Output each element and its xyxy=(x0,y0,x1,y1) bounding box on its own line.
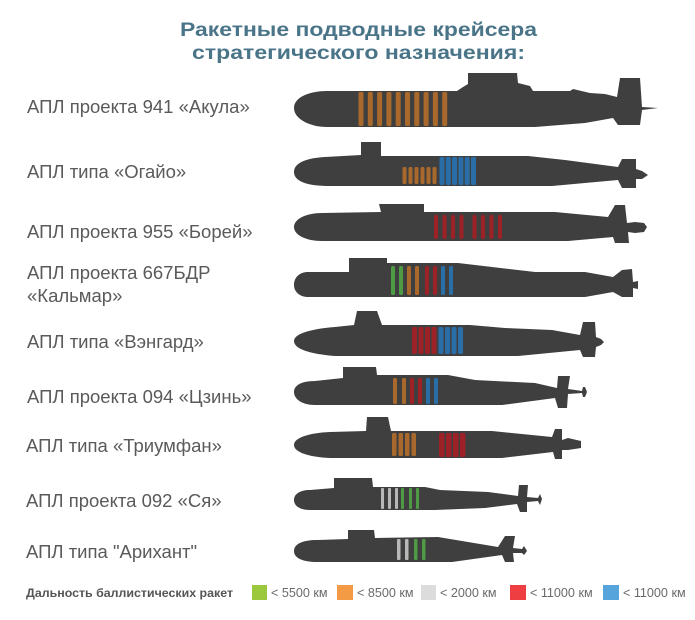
submarine: Arihant xyxy=(294,530,527,562)
submarine: Akula xyxy=(294,73,658,127)
legend item: gray xyxy=(421,585,497,600)
legend item: gray: < 2000 км xyxy=(440,586,497,600)
legend xyxy=(26,585,686,600)
label: Akula: АПЛ проекта 941 «Акула» xyxy=(27,96,250,117)
label: Xia: АПЛ проекта 092 «Ся» xyxy=(26,490,222,511)
label: Vanguard: АПЛ типа «Вэнгард» xyxy=(27,331,204,352)
legend title: Дальность баллистических ракет xyxy=(26,586,233,600)
legend item: red: < 11000 км xyxy=(530,586,593,600)
submarine: Triomphant xyxy=(294,417,581,459)
title xyxy=(180,20,538,64)
label: Jin: АПЛ проекта 094 «Цзинь» xyxy=(27,386,252,407)
submarine: Ohio xyxy=(294,142,648,188)
label: Arihant: АПЛ типа "Арихант" xyxy=(26,541,197,562)
title: стратегического назначения: xyxy=(192,43,525,64)
label: Ohio: АПЛ типа «Огайо» xyxy=(27,161,186,182)
submarine: Vanguard xyxy=(294,311,604,357)
submarine: Jin xyxy=(294,367,587,408)
legend item: orange xyxy=(337,585,414,600)
title: Ракетные подводные крейсера xyxy=(180,20,538,41)
label: Kalmar: АПЛ проекта 667БДР xyxy=(27,262,210,283)
legend item: blue: < 11000 км xyxy=(623,586,686,600)
label: Triomphant: АПЛ типа «Триумфан» xyxy=(26,435,222,456)
label: Borei: АПЛ проекта 955 «Борей» xyxy=(27,221,253,242)
legend item: orange: < 8500 км xyxy=(357,586,414,600)
submarine: Borei xyxy=(294,204,647,243)
legend item: green: < 5500 км xyxy=(271,586,328,600)
submarine: Kalmar xyxy=(294,258,638,297)
label: Kalmar: «Кальмар» xyxy=(27,285,122,306)
submarine: Xia xyxy=(294,478,542,512)
legend item: green xyxy=(252,585,328,600)
